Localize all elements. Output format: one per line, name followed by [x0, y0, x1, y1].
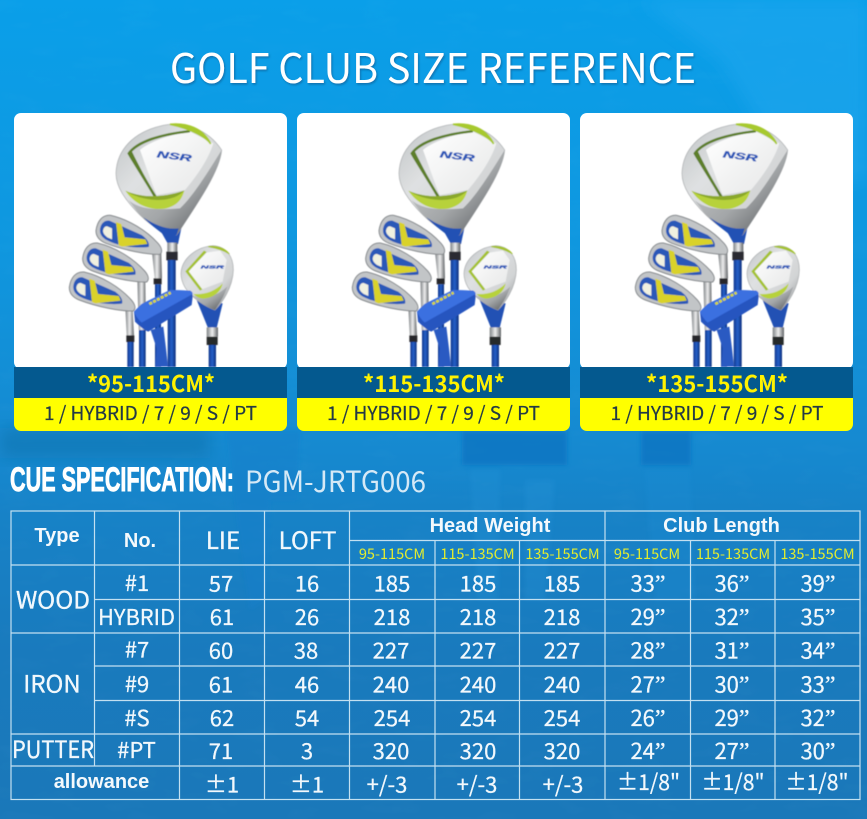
title: GOLF CLUB SIZE REFERENCE — [170, 35, 696, 95]
panel: 115-135CM club set — [297, 113, 570, 431]
table header: LOFT — [279, 521, 336, 556]
row: allowance: ±1/8" — [617, 765, 680, 797]
clubs illustration — [352, 124, 516, 367]
table header: LIE — [206, 521, 240, 556]
club list: 1 / HYBRID / 7 / 9 / S / PT — [44, 399, 257, 426]
row: allowance — [54, 765, 848, 800]
row: #PT — [117, 733, 836, 766]
row: #9: 240 — [544, 668, 580, 700]
row: #PT: 27” — [714, 734, 750, 766]
club list: 1 / HYBRID / 7 / 9 / S / PT — [610, 399, 824, 426]
size label: *95-115CM* — [87, 365, 215, 399]
type labels: PUTTER — [12, 730, 94, 765]
row: HYBRID: 32” — [714, 600, 750, 632]
row: #1: 36” — [714, 566, 750, 598]
row: allowance: +/-3 — [457, 768, 497, 800]
row: #9: 46 — [295, 668, 319, 700]
clubs illustration: NSR — [722, 149, 759, 164]
clubs illustration: NSR — [484, 264, 508, 270]
row: HYBRID: 26 — [295, 600, 319, 632]
row: #S: 26” — [630, 701, 666, 733]
row: #7: 227 — [373, 634, 409, 666]
row: HYBRID: 61 — [210, 600, 234, 632]
model number: PGM-JRTG006 — [245, 459, 426, 501]
row: #S: #S — [124, 701, 150, 733]
row: #1: 57 — [209, 566, 233, 598]
specification table — [11, 511, 860, 800]
row: allowance: ±1 — [290, 768, 324, 800]
row: #7: #7 — [125, 632, 149, 664]
row: #9: 61 — [209, 668, 233, 700]
table header — [34, 515, 855, 564]
table header: Head Weight — [430, 515, 551, 537]
yellow strip — [580, 398, 853, 431]
row: HYBRID: 218 — [460, 600, 496, 632]
row: #7: 28” — [630, 634, 666, 666]
row: #9: 240 — [460, 668, 496, 700]
table header: 135-155CM — [525, 543, 600, 564]
row: #7: 38 — [294, 634, 318, 666]
row: #S — [124, 701, 836, 733]
table header: No. — [124, 530, 156, 552]
row: #S: 254 — [374, 701, 410, 733]
row: #1: 33” — [630, 566, 666, 598]
table header: Club Length — [663, 515, 780, 537]
row: #S: 32” — [800, 701, 836, 733]
row: #1: 185 — [460, 566, 496, 598]
size label: *135-155CM* — [646, 365, 788, 399]
row: #S: 254 — [460, 701, 496, 733]
clubs illustration: NSR — [439, 149, 476, 164]
row: #1: 16 — [295, 566, 319, 598]
row: #9: 33” — [800, 668, 836, 700]
row: #7: 227 — [460, 634, 496, 666]
table header: 95-115CM — [614, 543, 680, 564]
row: #S: 29” — [714, 701, 750, 733]
row: #1: 185 — [544, 566, 580, 598]
clubs illustration: NSR — [201, 264, 225, 270]
row: #9: 30” — [714, 668, 750, 700]
size label: *115-135CM* — [363, 365, 505, 399]
clubs illustration — [69, 124, 233, 367]
row: #PT: 320 — [460, 734, 496, 766]
size band — [297, 367, 570, 398]
specification heading: CUE SPECIFICATION: — [10, 461, 234, 499]
row: #S: 54 — [295, 701, 319, 733]
row: #1: #1 — [125, 566, 149, 598]
row: #PT: 320 — [544, 734, 580, 766]
row: allowance: +/-3 — [543, 768, 583, 800]
row: allowance: ±1/8" — [786, 765, 848, 797]
row: HYBRID: 35” — [800, 600, 836, 632]
row: #9: 240 — [373, 668, 409, 700]
row: #9: 27” — [630, 668, 666, 700]
table header: Type — [34, 525, 80, 547]
row: allowance: ±1/8" — [702, 765, 764, 797]
row: #PT: 30” — [800, 734, 836, 766]
row: #S: 254 — [544, 701, 580, 733]
yellow strip — [14, 398, 287, 431]
yellow strip — [297, 398, 570, 431]
row: HYBRID — [98, 600, 836, 632]
row: #PT: 71 — [209, 734, 233, 766]
row: #PT: 24” — [630, 734, 666, 766]
panel: 135-155CM club set — [580, 113, 853, 431]
row: #7: 227 — [544, 634, 580, 666]
row: #7 — [125, 632, 836, 666]
row: allowance: +/-3 — [367, 768, 407, 800]
row: HYBRID: HYBRID — [98, 600, 175, 632]
type labels — [12, 580, 94, 765]
row: allowance: allowance — [54, 771, 149, 793]
row: #1: 39” — [800, 566, 836, 598]
row: #7: 34” — [800, 634, 836, 666]
row: HYBRID: 29” — [630, 600, 666, 632]
row: #1 — [125, 566, 836, 598]
row: HYBRID: 218 — [544, 600, 580, 632]
table header: 115-135CM — [696, 543, 770, 564]
size band — [14, 367, 287, 398]
panel: 95-115CM club set — [14, 113, 287, 431]
table header: 95-115CM — [359, 543, 425, 564]
row: #9: #9 — [125, 667, 149, 699]
table header: 115-135CM — [440, 543, 515, 564]
row: HYBRID: 218 — [374, 600, 410, 632]
row: #7: 60 — [209, 634, 233, 666]
row: #7: 31” — [714, 634, 750, 666]
clubs illustration: NSR — [156, 149, 193, 164]
clubs illustration: NSR — [767, 264, 791, 270]
table header: 135-155CM — [780, 543, 855, 564]
type labels: WOOD — [16, 580, 90, 616]
type labels: IRON — [23, 664, 81, 700]
row: #9 — [125, 667, 836, 700]
size band — [580, 367, 853, 398]
row: #1: 185 — [374, 566, 410, 598]
row: allowance: ±1 — [205, 768, 239, 800]
row: #S: 62 — [210, 701, 234, 733]
club list: 1 / HYBRID / 7 / 9 / S / PT — [327, 399, 540, 426]
row: #PT: 320 — [373, 734, 409, 766]
row: #PT: 3 — [301, 734, 313, 766]
clubs illustration — [635, 124, 799, 367]
row: #PT: #PT — [117, 733, 156, 765]
